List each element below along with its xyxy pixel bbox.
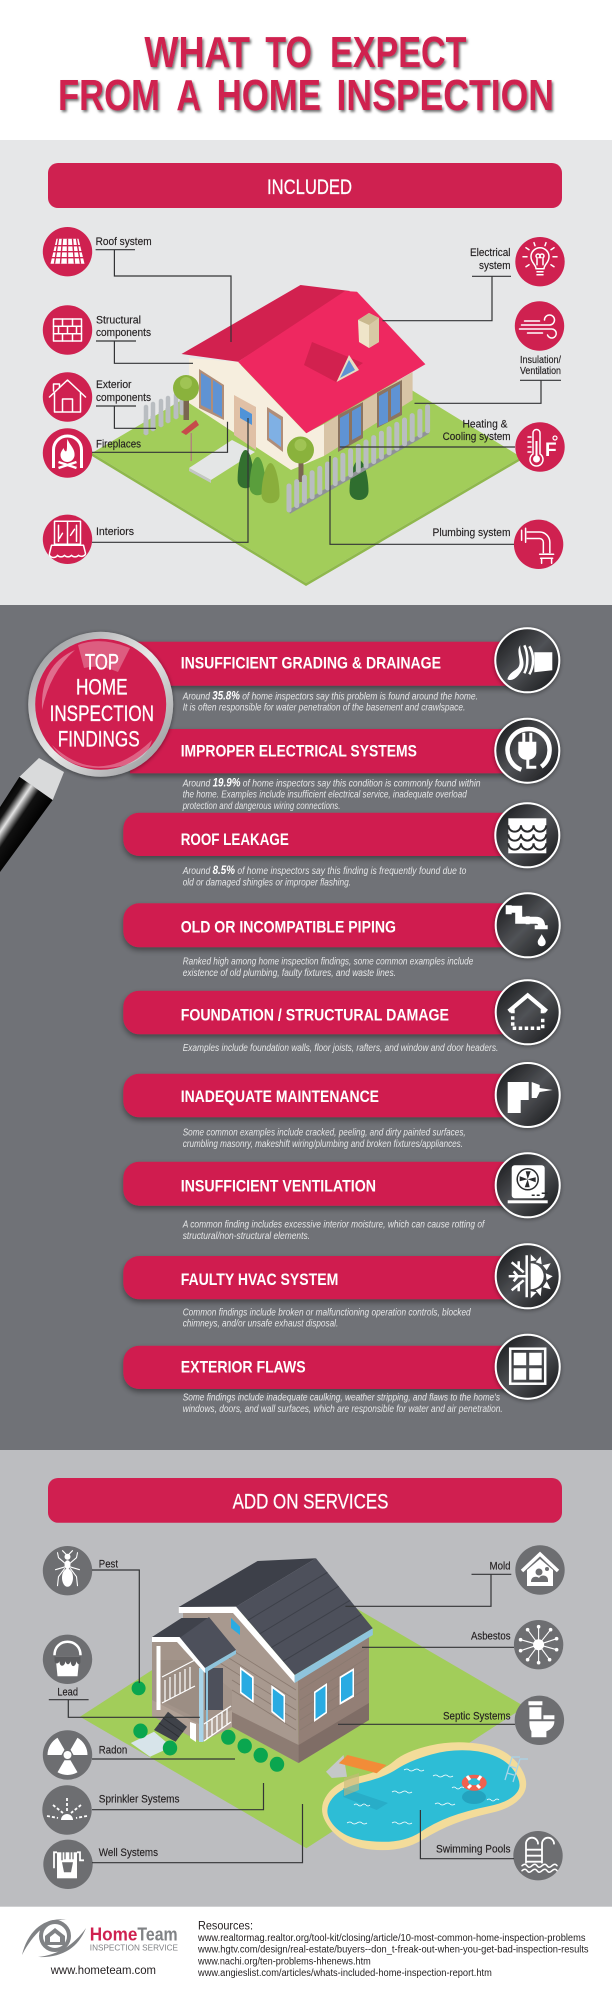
finding: faulty hvac system: FAULTY HVAC SYSTEM (181, 1270, 338, 1289)
finding: faulty hvac system: chimneys, and/or unsafe exhaust disposal. (183, 1319, 338, 1330)
magnifying glass with heading: INSPECTION (50, 701, 154, 726)
icon: sprinkler systems (42, 1785, 92, 1835)
label: plumbing system (330, 456, 514, 544)
heading: included: INCLUDED (267, 176, 352, 199)
title: EXPECT (330, 28, 466, 77)
magnifying glass with heading: FINDINGS (58, 727, 140, 752)
label: plumbing system: Plumbing system (432, 527, 510, 539)
label: electrical system: Electrical (470, 247, 510, 259)
label: insulation and ventilation (414, 355, 561, 403)
resources (197, 1918, 589, 1979)
finding: roof leakage: Around 8.5% of home inspectors say this finding is frequently found due to (182, 865, 467, 877)
label: swimming pools (420, 1810, 514, 1859)
label: structural components: Structural (96, 314, 141, 326)
label: heating and cooling: Cooling system (443, 431, 511, 443)
icon: fireplaces (43, 428, 92, 478)
label: exterior components: Exterior (96, 379, 132, 391)
title: INSPECTION (336, 71, 554, 120)
resources: Resources: (198, 1918, 253, 1932)
finding: insufficient ventilation (123, 1153, 560, 1242)
icon: insulation and ventilation (515, 301, 564, 351)
finding: improper electrical systems: the home. Examples include insufficient electrical service, inadequate overload (183, 790, 467, 801)
logo: hometeam: Home (90, 1925, 137, 1945)
resources: www.realtormag.realtor.org/tool-kit/closing/article/10-most-common-home-inspection-problems (197, 1933, 585, 1944)
label: insulation and ventilation: Ventilation (520, 366, 561, 377)
icon: heating and cooling: F (545, 440, 557, 461)
finding: insufficient ventilation: A common finding includes excessive interior moisture, which can cause rotting of (182, 1220, 485, 1231)
finding: inadequate maintenance (123, 1063, 560, 1150)
finding: old or incompatible piping: Ranked high among home inspection findings, some common examples include (183, 957, 474, 968)
icon: heating and cooling (515, 422, 565, 472)
icon: structural components (43, 305, 92, 355)
finding: exterior flaws (123, 1335, 560, 1415)
title (58, 28, 554, 120)
label: interiors (92, 418, 248, 542)
resources: www.angieslist.com/articles/whats-included-home-inspection-report.htm (197, 1968, 492, 1979)
finding: exterior flaws: windows, doors, and wall surfaces, which are responsible for water and air penetration. (183, 1404, 503, 1415)
label: fireplaces (92, 422, 228, 452)
title: WHAT (144, 28, 250, 77)
icon: plumbing system (514, 520, 563, 569)
label: septic systems: Septic Systems (443, 1710, 511, 1722)
finding: inadequate maintenance: crumbling masonry, makeshift wiring/plumbing and broken fixtures/appliances. (183, 1139, 463, 1150)
icon: electrical system (515, 237, 565, 286)
label: pest (92, 1558, 139, 1683)
panel: included (0, 140, 612, 605)
icon: exterior components (43, 372, 92, 422)
finding: foundation and structural damage: Examples include foundation walls, floor joists, rafters, and window and door headers. (183, 1043, 498, 1054)
label: roof system (96, 236, 231, 342)
label: swimming pools: Swimming Pools (436, 1844, 511, 1856)
finding: improper electrical systems (130, 719, 559, 812)
finding: old or incompatible piping: existence of old plumbing, faulty fixtures, and waste lines. (183, 968, 396, 979)
logo: hometeam: INSPECTION SERVICE (90, 1943, 178, 1953)
finding: improper electrical systems: Around 19.9% of home inspectors say this condition is commonly found within (182, 777, 481, 789)
logo: hometeam (22, 1919, 178, 1957)
illustration: house with red roof (92, 285, 521, 586)
icon: asbestos (514, 1620, 563, 1669)
label: sprinkler systems: Sprinkler Systems (99, 1793, 180, 1805)
illustration: house with grey roof (80, 1558, 525, 1848)
label: structural components (96, 314, 193, 363)
label: structural components: components (96, 327, 151, 339)
panel: top home inspection findings (0, 605, 612, 1450)
resources: www.nachi.org/ten-problems-hhenews.htm (197, 1956, 371, 1967)
finding: roof leakage (123, 803, 559, 888)
finding: faulty hvac system (123, 1244, 560, 1330)
finding: insufficient grading and drainage (130, 628, 559, 714)
icon: lead (43, 1635, 92, 1684)
finding: roof leakage: old or damaged shingles or improper flashing. (183, 877, 351, 888)
title: FROM (58, 71, 160, 120)
label: sprinkler systems (92, 1783, 264, 1810)
label: well systems: Well Systems (99, 1847, 158, 1859)
label: asbestos: Asbestos (471, 1630, 511, 1642)
magnifying glass with heading: TOP (85, 649, 119, 674)
label: fireplaces: Fireplaces (96, 439, 141, 451)
label: exterior components (96, 379, 156, 428)
title: HOME (217, 71, 321, 120)
logo: hometeam: Team (137, 1925, 178, 1945)
title: TO (265, 28, 312, 77)
finding: insufficient grading and drainage: Around 35.8% of home inspectors say this problem is found around the home. (182, 690, 478, 702)
label: radon: Radon (99, 1744, 127, 1756)
finding: exterior flaws: Some findings include inadequate caulking, weather stripping, and flaws to the home's (183, 1393, 500, 1404)
icon: swimming pools (513, 1831, 563, 1880)
finding: insufficient grading and drainage: It is often responsible for water penetration of the basement and crawlspace. (183, 703, 465, 714)
icon: mold (515, 1545, 565, 1595)
label: exterior components: components (96, 392, 151, 404)
finding: faulty hvac system: Common findings include broken or malfunctioning operation controls, blocked (183, 1307, 471, 1318)
finding: old or incompatible piping: OLD OR INCOMPATIBLE PIPING (181, 918, 396, 937)
label: well systems (92, 1804, 302, 1863)
label: electrical system: system (479, 260, 510, 272)
label: insulation and ventilation: Insulation/ (520, 355, 561, 366)
label: mold (345, 1560, 511, 1606)
website: www.hometeam.com (50, 1963, 156, 1977)
label: roof system: Roof system (96, 236, 152, 248)
panel: add on services (0, 1450, 612, 1907)
label: mold: Mold (490, 1560, 510, 1572)
heading: included (48, 163, 562, 208)
finding: insufficient grading and drainage: INSUFFICIENT GRADING & DRAINAGE (181, 654, 441, 673)
finding: exterior flaws: EXTERIOR FLAWS (181, 1358, 306, 1377)
label: electrical system (382, 247, 511, 321)
finding: roof leakage: ROOF LEAKAGE (181, 830, 289, 849)
label: heating and cooling: Heating & (462, 419, 508, 431)
panel: title (0, 0, 612, 140)
icon: roof system (43, 227, 92, 276)
label: interiors: Interiors (96, 526, 134, 538)
icon: pest (43, 1546, 92, 1595)
finding: insufficient ventilation: INSUFFICIENT VENTILATION (181, 1177, 376, 1196)
finding: inadequate maintenance: INADEQUATE MAINTENANCE (181, 1087, 379, 1106)
icon: interiors (43, 515, 92, 564)
icon: radon (43, 1730, 92, 1780)
heading: add on services: ADD ON SERVICES (233, 1491, 388, 1514)
magnifying glass with heading: HOME (76, 675, 128, 700)
icon: well systems (43, 1840, 93, 1889)
magnifying glass with heading (0, 632, 173, 872)
illustration: swimming pool (322, 1742, 528, 1850)
icon: septic systems (515, 1696, 564, 1745)
finding: improper electrical systems: protection and dangerous wiring connections. (182, 801, 340, 812)
panel: footer (0, 1907, 612, 1989)
label: pest: Pest (99, 1558, 118, 1570)
resources: www.hgtv.com/design/real-estate/buyers--don_t-freak-out-when-you-get-bad-inspection-results (197, 1945, 589, 1956)
finding: insufficient ventilation: structural/non-structural elements. (183, 1231, 310, 1242)
finding: improper electrical systems: IMPROPER ELECTRICAL SYSTEMS (181, 742, 417, 761)
heading: add on services (48, 1478, 562, 1523)
label: heating and cooling (340, 419, 515, 447)
label: lead: Lead (57, 1687, 78, 1699)
finding: inadequate maintenance: Some common examples include cracked, peeling, and dirty painted surfaces, (183, 1128, 466, 1139)
label: lead (49, 1687, 200, 1717)
finding: foundation and structural damage: FOUNDATION / STRUCTURAL DAMAGE (181, 1006, 449, 1025)
finding: old or incompatible piping (123, 893, 560, 979)
title: A (176, 71, 201, 120)
finding: foundation and structural damage (123, 980, 560, 1054)
